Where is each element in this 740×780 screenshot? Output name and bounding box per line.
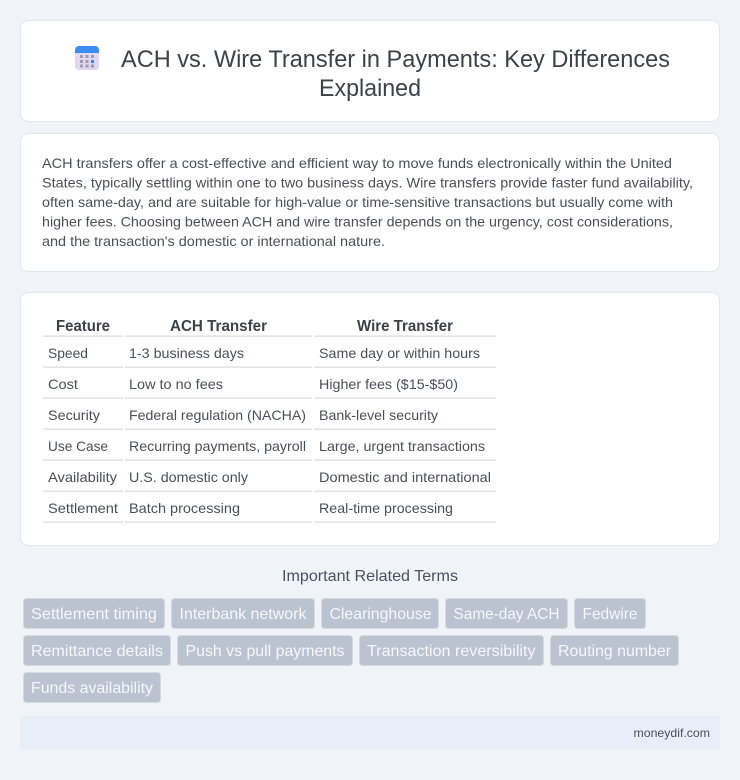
table row: cost: Higher fees ($15-$50) xyxy=(319,376,458,392)
table row: security: Security xyxy=(48,407,100,423)
text block: summary paragraph: higher fees. Choosing between ACH and wire transfer depends on the urgency, cost considerations, xyxy=(42,214,673,230)
icon: calendar xyxy=(75,46,99,70)
tag: same-day ach: Same-day ACH xyxy=(454,606,560,623)
tag: funds availability: Funds availability xyxy=(31,680,153,697)
panel: comparison table xyxy=(20,292,720,546)
tag: clearinghouse xyxy=(322,598,438,628)
tag: clearinghouse: Clearinghouse xyxy=(330,606,432,623)
table row: speed: Same day or within hours xyxy=(319,345,480,361)
tag: fedwire xyxy=(574,598,646,628)
tag: fedwire: Fedwire xyxy=(582,606,638,623)
tag: transaction reversibility xyxy=(360,636,544,666)
table row: use case: Use Case xyxy=(48,438,108,454)
tag: same-day ach xyxy=(446,598,568,628)
text block: summary paragraph: ACH transfers offer a cost-effective and efficient way to move funds electronically within the United xyxy=(42,155,672,171)
table row: availability: Availability xyxy=(48,469,117,485)
table row: security: Federal regulation (NACHA) xyxy=(129,407,306,423)
title: Explained xyxy=(319,75,421,102)
tag: interbank network xyxy=(172,598,314,628)
footer: moneydif.com xyxy=(634,726,710,740)
table header: ACH Transfer xyxy=(170,318,267,335)
table row: speed: Speed xyxy=(48,345,88,361)
title: ACH vs. Wire Transfer in Payments: Key Differences xyxy=(121,46,670,73)
text block: summary paragraph: often same-day, and are suitable for high-value or time-sensitive transactions but usually come with xyxy=(42,194,673,210)
tag: remittance details xyxy=(24,636,170,666)
tag: push vs pull payments xyxy=(178,636,352,666)
table row: security xyxy=(43,407,496,430)
tag: funds availability xyxy=(24,672,160,702)
table row: availability xyxy=(43,469,496,492)
table row: security: Bank-level security xyxy=(319,407,438,423)
tag: settlement timing xyxy=(24,598,164,628)
table header xyxy=(43,318,496,337)
title xyxy=(121,46,670,102)
table row: use case xyxy=(43,438,496,461)
heading: related terms: Important Related Terms xyxy=(282,568,458,585)
table row: settlement: Real-time processing xyxy=(319,500,453,516)
table row: cost xyxy=(43,376,496,399)
table row: settlement xyxy=(43,500,496,523)
tag: settlement timing: Settlement timing xyxy=(31,606,157,623)
table row: availability: Domestic and international xyxy=(319,469,491,485)
tag: push vs pull payments: Push vs pull payments xyxy=(186,643,344,660)
table row: cost: Low to no fees xyxy=(129,376,223,392)
text block: summary paragraph: States, typically settling within one to two business days. Wire transfers provide faster fund availability, xyxy=(42,174,693,190)
tag: routing number xyxy=(550,636,678,666)
table row: speed: 1-3 business days xyxy=(129,345,244,361)
tag: remittance details: Remittance details xyxy=(31,643,163,660)
table row: use case: Recurring payments, payroll xyxy=(129,438,306,454)
table row: use case: Large, urgent transactions xyxy=(319,438,485,454)
panel: title header xyxy=(20,20,720,122)
footer xyxy=(20,716,720,750)
table row: settlement: Batch processing xyxy=(129,500,240,516)
tag: interbank network: Interbank network xyxy=(180,606,307,623)
table row: settlement: Settlement xyxy=(48,500,118,516)
tag: routing number: Routing number xyxy=(558,643,672,660)
table row: availability: U.S. domestic only xyxy=(129,469,248,485)
table row: speed xyxy=(43,345,496,368)
tag: transaction reversibility: Transaction reversibility xyxy=(367,643,536,660)
table row: cost: Cost xyxy=(48,376,78,392)
table header: Feature xyxy=(56,318,110,335)
text block: summary paragraph: and the transaction's domestic or international nature. xyxy=(42,233,385,249)
panel: introduction xyxy=(20,134,720,272)
tag group: related terms xyxy=(24,598,678,702)
table header: Wire Transfer xyxy=(357,318,453,335)
text block: summary paragraph xyxy=(42,155,693,249)
